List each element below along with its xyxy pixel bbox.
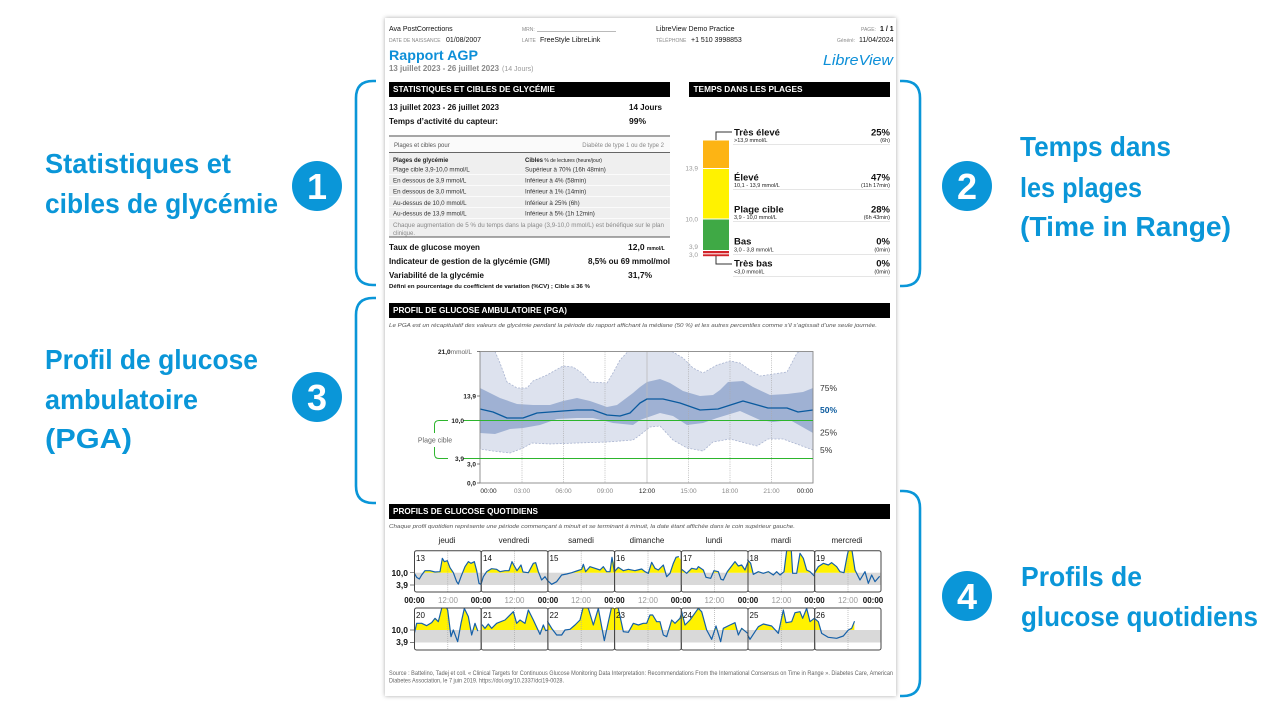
daily axis labels: 12:00 <box>838 596 859 605</box>
PGA chart: 5% <box>820 445 833 455</box>
PGA chart: 75% <box>820 383 837 393</box>
panel: statistiques et cibles de glycémie <box>389 82 670 290</box>
daily axis labels: 12:00 <box>704 596 725 605</box>
day 26 <box>814 608 882 650</box>
day 23: 23 <box>616 611 625 620</box>
PGA description: Le PGA est un récapitulatif des valeurs de glycémie pendant la période du rapport affichant la médiane (50 %) et les autres percentiles comme s’il s’agissait d’une seule journée. <box>389 323 877 329</box>
day 25 <box>747 608 816 650</box>
day 18 <box>747 550 816 592</box>
day 18: 18 <box>750 554 759 563</box>
range rows: 0% <box>876 236 891 248</box>
callout 3: profil de glucose ambulatoire <box>45 298 376 503</box>
range rows: >13,9 mmol/L <box>734 138 767 144</box>
report header: DATE DE NAISSANCE <box>389 38 441 44</box>
stacked bar: 3,0 <box>689 252 698 259</box>
PGA chart: 25% <box>820 428 837 438</box>
PGA chart: 21:00 <box>763 488 780 495</box>
daily axis labels: 00:00 <box>404 596 425 605</box>
daily axis labels: 3,9 <box>396 637 408 647</box>
targets table: Inférieur à 4% (58min) <box>525 178 586 184</box>
day 14: 14 <box>483 554 492 563</box>
weekday labels: vendredi <box>499 536 530 545</box>
range rows: Élevé <box>734 172 759 184</box>
weekday labels: mardi <box>771 536 791 545</box>
range rows: 0% <box>876 258 891 270</box>
report header <box>389 26 894 73</box>
callout 2: temps dans les plages: 2 <box>957 166 977 207</box>
PGA chart: 0,0 <box>467 480 476 488</box>
callout 4: profils de glucose quotidiens: 4 <box>957 576 977 617</box>
targets table: Cibles % de lectures (heure/jour) <box>525 158 602 164</box>
range rows: 28% <box>871 204 891 216</box>
weekday labels <box>438 536 863 545</box>
day 20: 20 <box>416 611 425 620</box>
day 26: 26 <box>816 611 825 620</box>
daily axis labels: 10,0 <box>391 568 408 578</box>
range rows: (6h 43min) <box>864 215 890 221</box>
callout 2: temps dans les plages <box>900 81 1231 286</box>
PGA chart: 10,0 <box>451 418 464 425</box>
day 16 <box>614 551 681 597</box>
weekday labels: jeudi <box>438 536 456 545</box>
report page <box>385 18 896 696</box>
targets table: Plage cible 3,9-10,0 mmol/L <box>393 166 470 174</box>
panel: statistiques et cibles de glycémie: 13 juillet 2023 - 26 juillet 2023 <box>389 102 499 112</box>
glucose metrics: 12,0 mmol/L <box>628 242 665 252</box>
targets table: Diabète de type 1 ou de type 2 <box>582 143 665 149</box>
report header: LAITE <box>522 38 537 44</box>
day 15 <box>548 551 615 597</box>
glucose metrics: 31,7% <box>628 270 653 280</box>
PGA chart: 03:00 <box>514 488 531 495</box>
PGA chart: 21,0mmol/L <box>438 349 472 356</box>
stacked bar: 10,0 <box>685 216 698 224</box>
PGA chart: 12:00 <box>639 488 656 495</box>
callout 4: profils de glucose quotidiens: glucose quotidiens <box>1021 601 1258 632</box>
PGA chart: 06:00 <box>555 488 572 495</box>
report header: FreeStyle LibreLink <box>540 37 601 44</box>
report header: 11/04/2024 <box>859 37 894 44</box>
day 17: 17 <box>683 554 692 563</box>
source note: Diabetes Association, le 7 juin 2019. https://doi.org/10.2337/dci19-0028. <box>389 678 564 684</box>
callout 3: profil de glucose ambulatoire: ambulatoire <box>45 384 198 415</box>
PGA chart: 15:00 <box>680 488 697 495</box>
report header: LibreView <box>823 52 894 69</box>
panel: statistiques et cibles de glycémie: 99% <box>629 116 646 126</box>
PGA chart: 00:00 <box>480 488 497 495</box>
report header: +1 510 3998853 <box>691 37 742 44</box>
heading: statistiques <box>389 82 670 97</box>
stacked bar: 3,9 <box>689 244 698 251</box>
targets table: Inférieur à 25% (6h) <box>525 200 580 207</box>
glucose metrics: Défini en pourcentage du coefficient de variation (%CV) ; Cible ≤ 36 % <box>389 284 590 290</box>
report header: 1 / 1 <box>880 26 894 33</box>
callout 1: statistiques et cibles de glycémie <box>45 81 376 285</box>
PGA chart: Plage cible <box>418 438 452 444</box>
callout 1: statistiques et cibles de glycémie: cibles de glycémie <box>45 188 278 219</box>
heading: PGA: PROFIL DE GLUCOSE AMBULATOIRE (PGA) <box>393 306 567 315</box>
day 15: 15 <box>550 554 559 563</box>
day 19: 19 <box>816 554 825 563</box>
report header: LibreView Demo Practice <box>656 26 735 33</box>
PGA chart: 3,9 <box>455 456 464 463</box>
targets table: Plages et cibles pour <box>394 143 450 149</box>
targets table: En dessous de 3,0 mmol/L <box>393 188 467 196</box>
panel: temps dans les plages <box>685 82 891 276</box>
day 24: 24 <box>683 611 692 620</box>
daily axis labels: 00:00 <box>738 596 759 605</box>
glucose metrics: Taux de glucose moyen <box>389 242 480 252</box>
panel: profil de glucose ambulatoire <box>389 303 890 495</box>
day 24 <box>680 608 748 650</box>
callout 1: statistiques et cibles de glycémie: 1 <box>307 166 327 207</box>
heading: profils quotidiens <box>389 504 890 519</box>
day 13 <box>414 551 481 597</box>
daily axis labels: 12:00 <box>504 596 525 605</box>
heading: statistiques: STATISTIQUES ET CIBLES DE GLYCÉMIE <box>393 85 556 94</box>
report header: Généré: <box>837 38 855 44</box>
weekday labels: lundi <box>706 536 723 545</box>
stacked bar <box>685 132 732 264</box>
daily description: Chaque profil quotidien représente une période commençant à minuit et se terminant à minuit, la date étant affichée dans le coin supérieur gauche. <box>389 524 795 530</box>
callout 3: profil de glucose ambulatoire: Profil de glucose <box>45 344 258 375</box>
callout 2: temps dans les plages: les plages <box>1020 172 1142 203</box>
report header: 13 juillet 2023 - 26 juillet 2023 <box>389 63 499 73</box>
daily axis labels <box>391 568 884 647</box>
panel: statistiques et cibles de glycémie: Temps d’activité du capteur: <box>389 116 498 126</box>
day 23 <box>614 608 682 650</box>
daily axis labels: 3,9 <box>396 580 408 590</box>
PGA chart: 09:00 <box>597 488 614 495</box>
callout 1: statistiques et cibles de glycémie: Statistiques et <box>45 148 231 179</box>
daily axis labels: 00:00 <box>863 596 884 605</box>
callout 4: profils de glucose quotidiens <box>900 491 1258 696</box>
heading: temps dans les plages: TEMPS DANS LES PLAGES <box>694 85 803 94</box>
day 19 <box>814 550 882 592</box>
range rows <box>733 128 891 276</box>
range rows: 3,9 - 10,0 mmol/L <box>734 215 777 221</box>
report header: (14 Jours) <box>502 66 534 73</box>
weekday labels: dimanche <box>630 536 665 545</box>
PGA chart: 00:00 <box>797 488 814 495</box>
range rows: 3,0 - 3,8 mmol/L <box>734 248 774 254</box>
stacked bar: 13,9 <box>685 166 698 172</box>
PGA chart <box>418 349 837 495</box>
report header: Rapport AGP <box>389 47 478 63</box>
range rows: (11h 17min) <box>861 183 890 189</box>
callout 3: profil de glucose ambulatoire: 3 <box>307 377 327 418</box>
panel: profils de glucose quotidiens <box>389 504 890 667</box>
targets table: Supérieur à 70% (16h 48min) <box>525 166 606 174</box>
targets table: Inférieur à 1% (14min) <box>525 188 586 196</box>
PGA chart: 13,9 <box>463 394 476 400</box>
PGA chart: 50% <box>820 405 837 415</box>
report header: TÉLÉPHONE <box>656 37 687 44</box>
targets table: Chaque augmentation de 5 % du temps dans la plage (3,9-10,0 mmol/L) est bénéfique sur le plan <box>393 223 664 229</box>
day 25: 25 <box>750 611 759 620</box>
weekday labels: samedi <box>568 536 594 545</box>
report header: 01/08/2007 <box>446 37 481 44</box>
targets table <box>389 136 670 237</box>
source note: Source : Battelino, Tadej et coll. « Clinical Targets for Continuous Glucose Monitoring Data Interpretation: Recommendations From the International Consensus on Time in Range ». Diabetes Care, American <box>389 671 893 677</box>
daily axis labels: 10,0 <box>391 625 408 635</box>
range rows: 47% <box>871 172 891 184</box>
targets table: Plages de glycémie <box>393 158 449 164</box>
daily axis labels: 00:00 <box>538 596 559 605</box>
source note <box>389 671 893 684</box>
callout 3: profil de glucose ambulatoire: (PGA) <box>45 423 132 454</box>
glucose metrics <box>389 242 670 290</box>
report header: PAGE: <box>861 27 876 33</box>
range rows: Très bas <box>734 258 773 270</box>
daily axis labels: 00:00 <box>804 596 825 605</box>
daily axis labels: 00:00 <box>604 596 625 605</box>
range rows: Bas <box>734 236 751 248</box>
callout 2: temps dans les plages: Temps dans <box>1020 131 1171 162</box>
report header: Ava PostCorrections <box>389 26 453 33</box>
callout 2: temps dans les plages: (Time in Range) <box>1020 211 1231 242</box>
day 13: 13 <box>416 554 425 563</box>
heading: profils quotidiens: PROFILS DE GLUCOSE QUOTIDIENS <box>393 507 539 516</box>
range rows: (0min) <box>874 270 890 276</box>
PGA chart: 18:00 <box>722 488 739 495</box>
glucose metrics: 8,5% ou 69 mmol/mol <box>588 256 670 266</box>
targets table: Au-dessus de 10,0 mmol/L <box>393 200 467 207</box>
day 17 <box>681 551 748 597</box>
heading: temps dans les plages <box>689 82 890 97</box>
day 21: 21 <box>483 611 492 620</box>
range rows: (6h) <box>880 138 890 144</box>
glucose metrics: Indicateur de gestion de la glycémie (GMI) <box>389 256 550 266</box>
range rows: <3,0 mmol/L <box>734 270 764 276</box>
day 16: 16 <box>616 554 625 563</box>
targets table: clinique. <box>393 231 415 237</box>
daily axis labels: 00:00 <box>671 596 692 605</box>
daily axis labels: 12:00 <box>571 596 592 605</box>
range rows: 25% <box>871 128 891 138</box>
range rows: (0min) <box>874 248 890 254</box>
range rows: Plage cible <box>734 204 784 216</box>
glucose metrics: Variabilité de la glycémie <box>389 270 484 280</box>
day 22 <box>547 608 616 650</box>
panel: statistiques et cibles de glycémie: 14 Jours <box>629 102 662 112</box>
day 22: 22 <box>550 611 559 620</box>
weekday labels: mercredi <box>831 536 863 545</box>
daily axis labels: 12:00 <box>638 596 659 605</box>
heading: PGA <box>389 303 890 318</box>
daily axis labels: 12:00 <box>438 596 459 605</box>
range rows: 10,1 - 13,9 mmol/L <box>734 183 780 189</box>
targets table: En dessous de 3,9 mmol/L <box>393 178 467 184</box>
range rows: Très élevé <box>734 128 780 138</box>
callout 4: profils de glucose quotidiens: Profils de <box>1021 561 1142 592</box>
day 14 <box>481 551 548 597</box>
PGA chart: 3,0 <box>467 462 476 468</box>
targets table: Au-dessus de 13,9 mmol/L <box>393 210 467 218</box>
day 20 <box>414 608 482 650</box>
day 21 <box>480 608 548 650</box>
targets table: Inférieur à 5% (1h 12min) <box>525 210 595 218</box>
daily axis labels: 00:00 <box>471 596 492 605</box>
daily axis labels: 12:00 <box>771 596 792 605</box>
report header: MRN: <box>522 27 535 33</box>
